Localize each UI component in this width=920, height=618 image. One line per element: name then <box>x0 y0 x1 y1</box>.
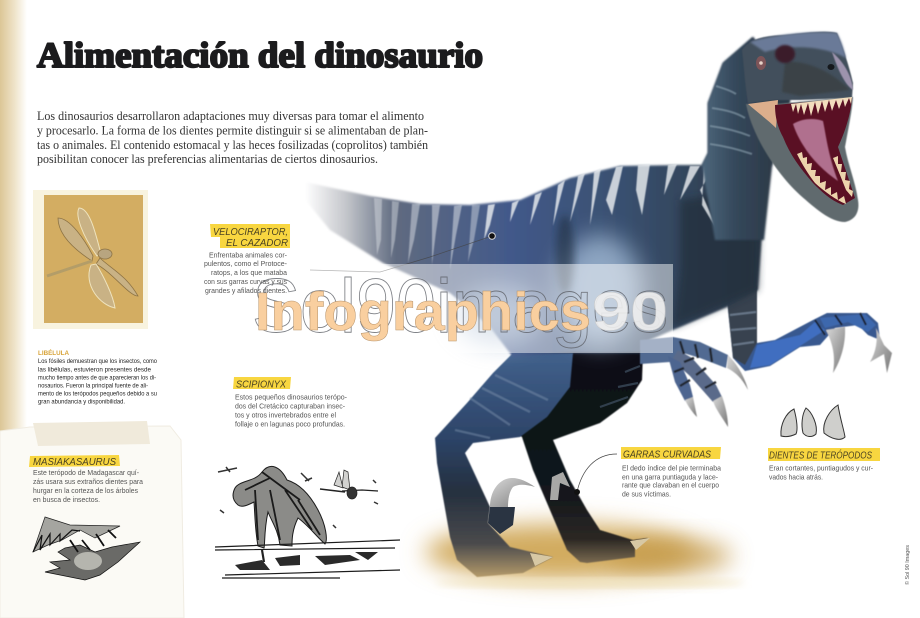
belly highlight <box>558 235 642 345</box>
body text: El dedo índice del pie terminaba <box>622 464 722 472</box>
claw <box>685 397 697 417</box>
body text: Estos pequeños dinosaurios terópo- <box>235 392 348 402</box>
label: VELOCIRAPTOR, <box>213 227 288 238</box>
illustration: dinosaur <box>303 32 892 577</box>
tongue <box>793 119 838 181</box>
raised toe block <box>488 507 515 534</box>
panel: Libélula: Los fósiles demuestran que los insectos, como <box>38 358 157 365</box>
body text: rante que clavaban en el cuerpo <box>622 480 719 490</box>
watermark: Infographics90: Infographics <box>255 282 591 342</box>
body text: follaje o en lagunas poco profundas. <box>235 420 345 428</box>
body text: zás usara sus extraños dientes para <box>33 477 144 486</box>
icon: three teeth <box>781 405 845 439</box>
far leg (blue) <box>435 353 573 577</box>
body text: Este terópodo de Madagascar quí- <box>33 468 139 477</box>
panel: Libélula: las libélulas, estuvieron presentes desde <box>38 366 151 374</box>
dark shoulder shading <box>672 190 760 328</box>
intro text: y procesarlo. La forma de los dientes permite distinguir si se alimentaban de plan- <box>37 124 428 138</box>
lower teeth <box>797 152 846 204</box>
small insects <box>218 467 378 528</box>
panel: Libélula: mento de los terópodos pequeños debido a su <box>38 390 157 398</box>
back stripes <box>374 164 720 270</box>
watermark: Sol90images outline: Sol90images <box>252 264 668 349</box>
panel: Masiakasaurus note <box>0 421 184 618</box>
far arm and hand <box>727 285 892 373</box>
leg stripes <box>455 375 548 438</box>
body text: dos del Cretácico capturaban insec- <box>235 402 346 410</box>
watermark: Infographics90: 90 <box>592 282 668 342</box>
left paper strip <box>0 0 27 440</box>
panel: Libélula: mucho tiempo antes de que aparecieran los di- <box>38 374 156 382</box>
cheek <box>748 100 778 128</box>
callout line: Velociraptor <box>310 233 495 272</box>
dark leg stripes <box>600 366 640 407</box>
tape <box>33 421 150 446</box>
panel: Velociraptor <box>204 224 290 295</box>
body text <box>235 392 348 428</box>
claw <box>826 327 845 373</box>
label: DIENTES DE TERÓPODOS <box>769 448 872 462</box>
panel: Libélula: nosaurios. Fueron la principal fuente de ali- <box>38 382 148 390</box>
panel: Libélula: LIBÉLULA <box>38 348 69 357</box>
dragonfly <box>320 470 378 499</box>
torso and tail <box>303 37 790 357</box>
body text: en una garra puntiaguda y lace- <box>622 472 718 482</box>
credit: © Sol 90 Images <box>904 544 911 585</box>
panel: Scipionyx <box>215 377 400 578</box>
intro text: Los dinosaurios desarrollaron adaptaciones muy diversas para tomar el alimento <box>37 109 424 123</box>
panel: dragonfly fossil <box>33 190 148 329</box>
label <box>210 224 290 249</box>
body text: grandes y afilados dientes. <box>205 286 287 295</box>
body text: pulentos, como el Protoce- <box>204 259 287 268</box>
claw <box>713 396 728 427</box>
body text: Eran cortantes, puntiagudos y cur- <box>769 464 873 472</box>
upper teeth <box>791 97 852 116</box>
eye patch <box>775 45 795 63</box>
mouth interior <box>775 98 855 205</box>
panel: Dientes de terópodos <box>768 405 880 482</box>
watermark panel <box>265 264 673 353</box>
panel: Garras curvadas <box>621 447 722 498</box>
illustration: jaw sketch <box>33 517 140 580</box>
panel: Libélula <box>38 348 157 406</box>
intro text <box>37 109 428 166</box>
label: GARRAS CURVADAS <box>623 450 711 460</box>
body text <box>204 250 288 295</box>
near hand <box>640 337 748 427</box>
body text: de sus víctimas. <box>622 490 671 498</box>
label: Masiakasaurus: MASIAKASAURUS <box>33 457 116 468</box>
claw <box>870 328 892 373</box>
body text: con sus garras curvas y sus <box>204 277 287 286</box>
body text: vados hacia atrás. <box>769 472 823 482</box>
neck stripes <box>710 86 752 154</box>
label: SCIPIONYX <box>236 380 286 390</box>
body text <box>622 464 722 498</box>
label: EL CAZADOR <box>226 238 288 249</box>
ground dust <box>425 524 745 587</box>
head <box>702 32 858 240</box>
body text: ratops, a los que mataba <box>211 268 288 277</box>
body text <box>33 468 144 504</box>
callout line: Garras curvadas <box>574 454 617 495</box>
illustration: Scipionyx sketch <box>215 466 400 578</box>
nostril <box>828 64 834 70</box>
skull <box>742 32 853 103</box>
near leg (dark) <box>500 325 648 563</box>
title: Alimentación del dinosaurio <box>37 35 483 75</box>
claw <box>727 355 748 390</box>
panel: Libélula: gran abundancia y disponibilidad. <box>38 398 125 406</box>
toe claws <box>530 553 553 566</box>
body text <box>769 464 873 482</box>
intro text: posibilitan conocer las preferencias alimentarias de ciertos dinosaurios. <box>37 152 378 166</box>
claw: sickle on near foot <box>550 472 570 500</box>
neck <box>702 37 790 240</box>
icon: dragonfly imprint <box>47 208 138 308</box>
claw: raised toe <box>490 478 535 507</box>
lower jaw <box>746 97 858 222</box>
body text: tos y otros invertebrados entre el <box>235 410 336 420</box>
eye <box>756 56 766 70</box>
body text: hurgar en la corteza de los árboles <box>33 486 138 495</box>
intro text: tas o animales. El contenido estomacal y las heces fosilizadas (coprolitos) también <box>37 138 428 152</box>
body text: en busca de insectos. <box>33 495 100 504</box>
body text: Enfrentaba animales cor- <box>209 250 288 260</box>
